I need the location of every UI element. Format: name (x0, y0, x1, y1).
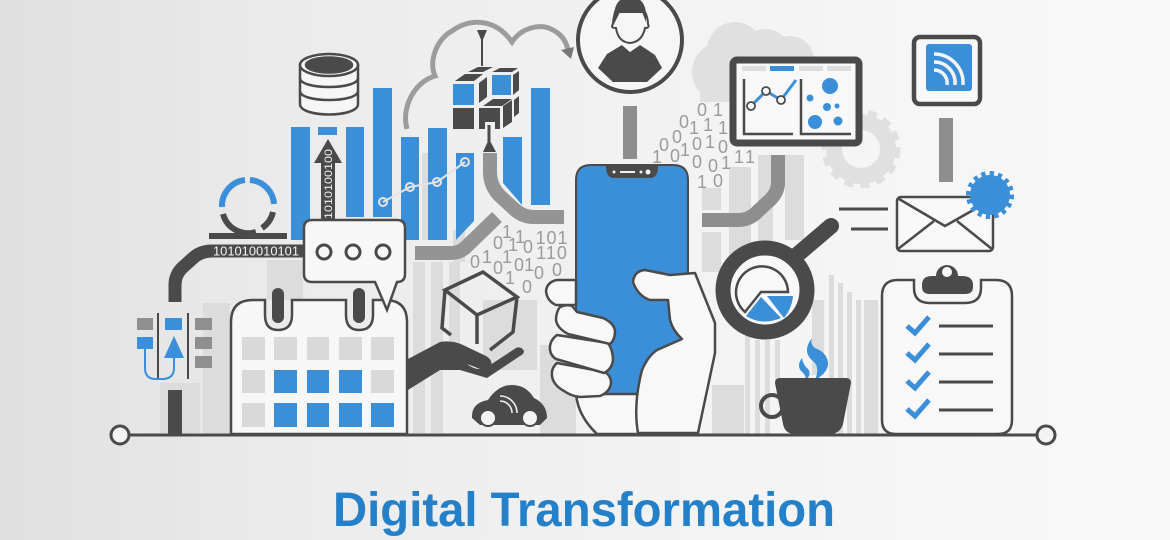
sorting widget (137, 313, 212, 379)
gray cloud behind tablet (692, 22, 814, 102)
title: Digital Transformation (333, 484, 835, 537)
binary digits left cluster: 0 (470, 252, 480, 272)
dashboard tablet (733, 60, 859, 143)
binary digits right cluster: 1 (697, 172, 707, 192)
timeline baseline (111, 426, 1055, 444)
upward data arrow (314, 139, 342, 222)
binary digits left cluster: 01 (514, 255, 534, 275)
envelope (897, 197, 993, 251)
trend line on bars (379, 158, 469, 206)
binary digits right cluster: 0 (718, 137, 728, 157)
binary digits right cluster: 0 (672, 127, 682, 147)
cube network icon (453, 30, 519, 152)
binary digits left cluster: 1 (502, 247, 512, 267)
binary digits left cluster: 1 (508, 235, 518, 255)
binary digits left cluster: 1 (482, 247, 492, 267)
binary digits right cluster: 0 (692, 134, 702, 154)
binary digits right cluster: 0 (708, 156, 718, 176)
connector below avatar (623, 106, 637, 159)
upward data arrow: 1010100100 (323, 149, 335, 219)
binary digits left cluster: 0 (552, 260, 562, 280)
binary digits right cluster (652, 100, 755, 192)
cloud outline (406, 22, 568, 129)
binary digits left cluster: 0 (534, 263, 544, 283)
binary digits left cluster: 101 (535, 228, 569, 248)
connector below wifi tile (939, 118, 953, 182)
magnifier with pie chart (723, 226, 831, 332)
coffee cup (761, 378, 851, 434)
binary digits right cluster: 0 (713, 171, 723, 191)
envelope notification badge (968, 174, 1012, 216)
calendar (231, 288, 407, 434)
ring platform (209, 233, 287, 239)
chat bubble (304, 220, 405, 310)
wireframe cube (442, 272, 517, 350)
binary digits right cluster: 0 (697, 100, 707, 120)
background city skyline (160, 153, 878, 435)
binary digits left cluster: 1 (515, 227, 525, 247)
cloud arrowhead (561, 47, 574, 59)
binary digits right cluster: 0 (679, 112, 689, 132)
binary digits left cluster: 110 (536, 243, 568, 263)
coffee steam (799, 338, 828, 380)
connected car (472, 385, 547, 426)
binary digits right cluster: 1 (734, 147, 744, 167)
gray pipe connector left (415, 217, 497, 253)
binary digits right cluster: 1 (721, 153, 731, 173)
binary digits left cluster: 0 (522, 277, 532, 297)
dark pipe lower segment (168, 390, 182, 434)
binary digits right cluster: 1 (745, 147, 755, 167)
speed lines (839, 209, 888, 229)
binary digits right cluster: 1 (652, 147, 662, 167)
binary digits right cluster: 1 (705, 132, 715, 152)
wifi tile (914, 37, 980, 104)
binary digits right cluster: 1 (680, 140, 690, 160)
person avatar (578, 0, 682, 92)
database icon (300, 54, 358, 114)
smartphone (576, 165, 688, 394)
binary digits right cluster: 1 (713, 100, 723, 120)
binary digits right cluster: 1 (718, 118, 728, 138)
binary digits left cluster: 1 (502, 222, 512, 242)
binary digits right cluster: 0 (692, 152, 702, 172)
binary digits left cluster: 0 (493, 258, 503, 278)
dark data pipe (175, 244, 306, 302)
connector below tablet (702, 155, 778, 220)
binary digits left cluster (470, 222, 569, 297)
refresh ring icon (222, 180, 274, 233)
binary digits left cluster: 0 (523, 237, 533, 257)
gray pipe connector right (490, 153, 564, 217)
binary digits right cluster: 0 (659, 135, 669, 155)
binary digits left cluster: 1 (505, 268, 515, 288)
hand holding phone (546, 270, 715, 434)
open hand holding cube (408, 341, 524, 390)
bar chart (291, 88, 550, 240)
binary digits right cluster: 1 (689, 118, 699, 138)
gear (825, 113, 897, 185)
binary digits left cluster: 0 (493, 233, 503, 253)
binary digits right cluster: 1 (703, 115, 713, 135)
clipboard checklist (882, 265, 1012, 434)
dark data pipe: 101010010101 (213, 244, 299, 258)
binary digits right cluster: 0 (670, 146, 680, 166)
